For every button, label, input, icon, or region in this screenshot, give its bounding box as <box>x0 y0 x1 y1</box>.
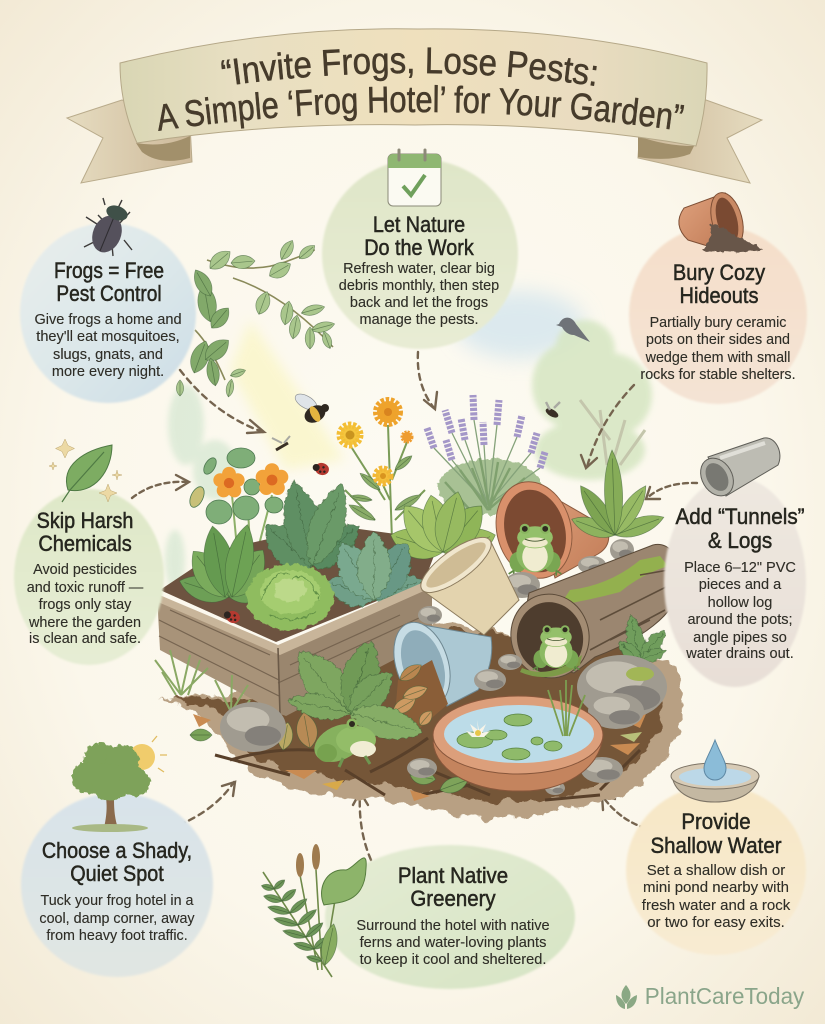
banner body <box>120 29 707 146</box>
arrows <box>132 352 697 860</box>
panel circle <box>322 159 518 349</box>
heading: Add “Tunnels” <box>675 504 805 529</box>
heading: Skip Harsh <box>37 509 133 533</box>
body text: Avoid pesticides <box>33 562 137 578</box>
body text: back and let the frogs <box>350 295 488 311</box>
front frog <box>308 717 376 769</box>
body text <box>39 893 195 944</box>
panel circle <box>21 793 213 977</box>
body text: mini pond nearby with <box>643 879 789 896</box>
heading: Frogs = Free <box>54 259 164 283</box>
body text: they'll eat mosquitoes, <box>36 329 180 345</box>
body text: or two for easy exits. <box>647 914 785 931</box>
body text: angle pipes so <box>693 630 787 646</box>
heading: Let Nature <box>373 213 465 237</box>
panel: skip harsh chemicals <box>14 439 164 665</box>
heading: Do the Work <box>364 236 474 260</box>
body text: slugs, gnats, and <box>53 347 163 363</box>
title line 2: A Simple ‘Frog Hotel’ for Your Garden” <box>158 84 684 131</box>
right tree trunks <box>580 400 645 465</box>
title line 1: “Invite Frogs, Lose Pests: <box>221 47 597 86</box>
beige pot <box>413 528 519 635</box>
body text: more every night. <box>52 364 164 380</box>
heading: Greenery <box>410 886 496 911</box>
blue-green kale <box>322 532 428 613</box>
panel circle <box>626 785 806 955</box>
banner right tail <box>638 100 762 183</box>
heading: Chemicals <box>38 532 132 556</box>
heading <box>364 213 474 260</box>
heading: Plant Native <box>398 863 508 888</box>
arrow: shallow water <box>602 796 645 828</box>
arrow: tunnels <box>646 483 697 499</box>
scattered green leaves <box>409 768 471 797</box>
body text: ferns and water-loving plants <box>360 935 546 951</box>
heading: Quiet Spot <box>70 862 164 886</box>
big rocks <box>220 654 667 795</box>
bright leafy plant <box>386 488 500 566</box>
gnat <box>272 436 290 450</box>
garden scene <box>155 395 682 818</box>
bird <box>556 318 590 342</box>
body text: around the pots; <box>687 612 793 628</box>
body text: cool, damp corner, away <box>39 911 195 927</box>
ground <box>158 620 682 818</box>
body text: pieces and a <box>699 577 782 593</box>
panel: provide shallow water <box>626 740 806 955</box>
body text: where the garden <box>28 615 141 631</box>
body text: wedge them with small <box>645 350 790 366</box>
heading: Hideouts <box>680 284 758 308</box>
heading <box>37 509 133 556</box>
heading <box>673 261 766 308</box>
body text: pots on their sides and <box>646 332 790 348</box>
grass tufts <box>155 650 250 716</box>
heading <box>650 809 782 858</box>
heading <box>675 504 805 553</box>
heading: Provide <box>681 809 751 834</box>
marigolds <box>340 401 425 540</box>
body text <box>27 562 144 647</box>
pond dish <box>433 680 603 791</box>
body text <box>684 560 796 662</box>
title banner <box>66 28 763 184</box>
body text <box>339 261 499 328</box>
icon: calendar <box>388 150 441 206</box>
body text: Partially bury ceramic <box>650 315 786 331</box>
raised bed soil <box>160 525 440 642</box>
body text: Refresh water, clear big <box>343 261 495 277</box>
logo text: PlantCareToday <box>645 983 805 1009</box>
body text: Tuck your frog hotel in a <box>40 893 194 909</box>
body text: is clean and safe. <box>29 631 141 647</box>
heading <box>54 259 164 306</box>
right leafy plant <box>569 450 667 543</box>
panel: frogs = free pest control <box>20 198 196 403</box>
bee <box>293 391 329 426</box>
body text <box>642 862 791 931</box>
branch with leaves <box>176 238 336 397</box>
panel circle <box>20 223 196 403</box>
heading: Pest Control <box>56 282 162 306</box>
panel: let nature do the work <box>322 150 518 349</box>
fly <box>544 402 560 420</box>
body text: Surround the hotel with native <box>356 918 550 934</box>
icon: logo leaf <box>616 985 637 1009</box>
body text: Give frogs a home and <box>34 312 182 328</box>
panel circle <box>664 477 806 687</box>
rocks around pots <box>418 539 634 624</box>
body text: Set a shallow dish or <box>647 862 785 879</box>
kale <box>254 477 369 580</box>
body text: debris monthly, then step <box>339 278 499 294</box>
background watercolor scenery <box>165 238 652 590</box>
body text: to keep it cool and sheltered. <box>360 952 546 968</box>
terracotta pot with frog <box>486 473 609 587</box>
arrow: skip chemicals <box>132 475 189 498</box>
blue pot with leaves <box>384 615 492 728</box>
heading: Choose a Shady, <box>42 839 192 863</box>
log with frog <box>503 544 681 685</box>
heading <box>42 839 192 886</box>
right tree wash <box>532 320 652 480</box>
ladybug on bed <box>222 608 242 625</box>
raised bed wood <box>157 582 432 716</box>
arrow: native greenery <box>353 792 371 860</box>
moss on rock <box>626 667 654 681</box>
panel circle <box>325 845 575 989</box>
logo <box>616 983 805 1009</box>
body text <box>640 315 796 383</box>
heading: Bury Cozy <box>673 261 766 285</box>
arrow: bury hideouts <box>581 385 634 468</box>
front ferns <box>284 635 426 747</box>
body text <box>34 312 182 380</box>
fallen leaves <box>190 711 320 751</box>
panel circle <box>14 489 164 665</box>
body text: hollow log <box>708 595 772 611</box>
panel: choose a shady quiet spot <box>21 736 213 977</box>
arrow: let nature <box>418 352 437 409</box>
icon: tipped pot <box>679 189 763 252</box>
spinach <box>176 522 276 608</box>
left wash <box>165 385 237 590</box>
lettuce <box>246 564 334 630</box>
icon: beetle <box>84 198 132 257</box>
body text <box>356 918 550 968</box>
heading: & Logs <box>708 528 772 553</box>
right fern <box>614 613 670 666</box>
curved title paths <box>210 73 610 88</box>
icon: tree and sun <box>72 736 167 832</box>
body text: frogs only stay <box>39 597 132 613</box>
icon: PVC pipe <box>694 438 780 502</box>
banner fold shadows <box>136 136 694 161</box>
panel: bury cozy hideouts <box>629 189 807 404</box>
sun rays <box>230 320 345 470</box>
heading: Shallow Water <box>650 833 782 858</box>
panel: add tunnels and logs <box>664 438 806 687</box>
sky wash <box>455 291 585 359</box>
icon: fern and cattails <box>261 844 366 977</box>
body text: manage the pests. <box>360 312 478 328</box>
ladybug on kale <box>311 461 330 477</box>
heading <box>398 863 508 911</box>
arrow: pest control <box>180 370 264 433</box>
panel: plant native greenery <box>261 844 575 989</box>
body text: rocks for stable shelters. <box>640 367 796 383</box>
body text: Place 6–12" PVC <box>684 560 796 576</box>
body text: and toxic runoff — <box>27 580 144 596</box>
icon: leaf with sparkles <box>49 439 122 502</box>
body text: from heavy foot traffic. <box>46 928 188 944</box>
lavender <box>427 395 545 515</box>
body text: water drains out. <box>685 646 794 662</box>
body text: fresh water and a rock <box>642 897 791 914</box>
banner left tail <box>67 100 192 183</box>
arrow: shady spot <box>179 782 235 825</box>
panel circle <box>629 226 807 404</box>
nasturtium <box>187 448 288 580</box>
icon: water dish <box>671 740 759 802</box>
